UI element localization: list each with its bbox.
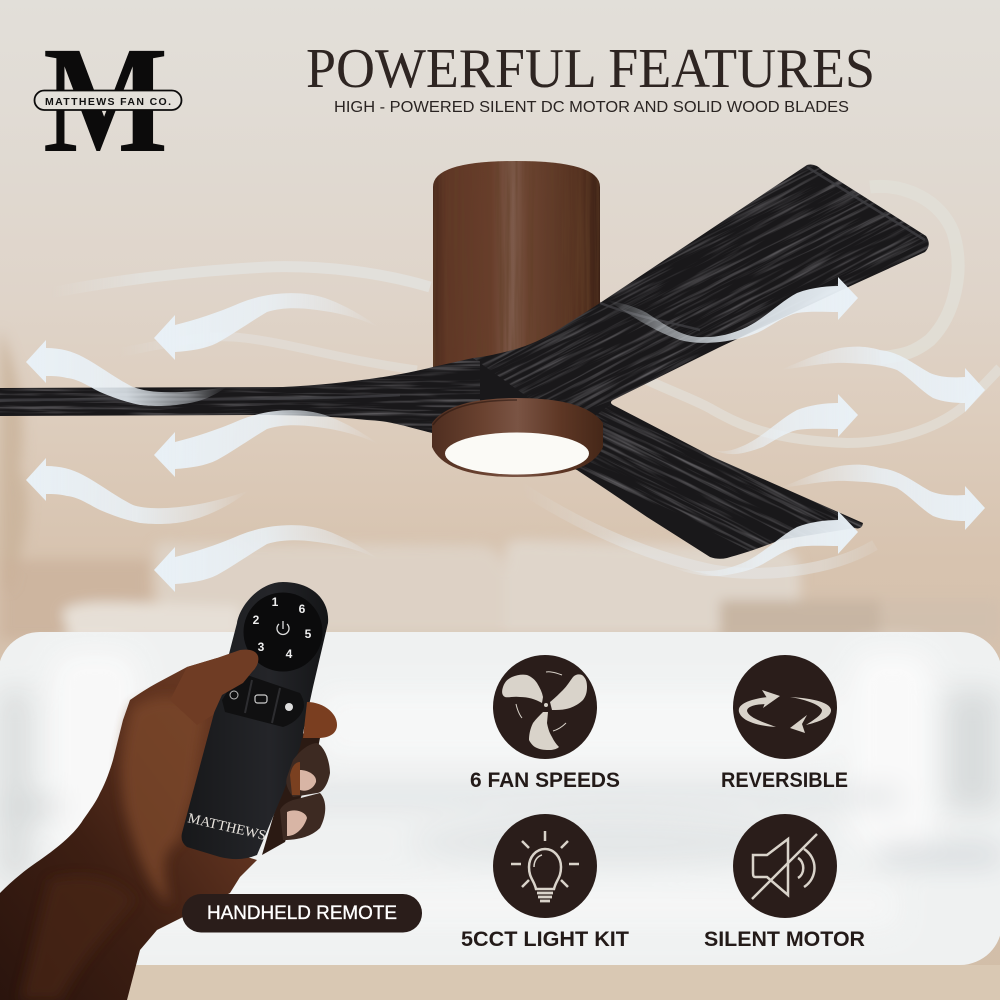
remote body bbox=[182, 582, 328, 859]
title: POWERFUL FEATURES bbox=[306, 38, 875, 100]
fan blades bbox=[0, 164, 929, 559]
arrow: bottom left bbox=[154, 525, 380, 592]
air tail: bottom right bbox=[520, 487, 875, 573]
thumb bbox=[170, 650, 258, 725]
air swirls behind fan bbox=[50, 186, 1000, 443]
arrow: middle right bbox=[710, 394, 858, 454]
feature: 6 fan speeds bbox=[470, 655, 620, 792]
feature: 5CCT light kit: 5CCT LIGHT KIT bbox=[461, 927, 629, 951]
feature: reversible bbox=[721, 655, 848, 792]
light housing ring bbox=[432, 398, 603, 477]
logo: Matthews Fan Co.: MATTHEWS FAN CO. bbox=[45, 96, 171, 108]
remote dial: 2 bbox=[253, 613, 260, 627]
arrow: middle left bbox=[154, 410, 380, 477]
arrow: upper left bbox=[154, 293, 380, 360]
feature: silent motor: SILENT MOTOR bbox=[704, 927, 865, 951]
icon: fan bbox=[502, 672, 587, 750]
arrow: far left top bbox=[26, 340, 227, 406]
remote dial bbox=[244, 592, 322, 672]
remote dial: 4 bbox=[286, 647, 293, 661]
LED light bbox=[445, 432, 589, 474]
palm highlight bbox=[121, 697, 205, 905]
label pill: handheld remote bbox=[182, 894, 422, 932]
motor canopy bbox=[433, 161, 600, 367]
icon: rotation arrows bbox=[739, 690, 831, 733]
icon: light bulb bbox=[511, 831, 579, 901]
hand holding remote bbox=[0, 582, 337, 1000]
remote buttons bbox=[222, 675, 304, 727]
feature: 6 fan speeds: 6 FAN SPEEDS bbox=[470, 768, 620, 792]
feature: reversible: REVERSIBLE bbox=[721, 768, 848, 792]
finger backing bbox=[262, 732, 320, 855]
arrow: far right top bbox=[780, 347, 985, 412]
remote brand: MATTHEWS bbox=[186, 811, 267, 844]
remote dial: 1 bbox=[272, 595, 279, 609]
airflow arrows bbox=[26, 277, 985, 592]
remote dial: 5 bbox=[305, 627, 312, 641]
arrow: bottom right bbox=[670, 511, 858, 576]
forearm tone bbox=[20, 876, 135, 1000]
remote dial: 3 bbox=[258, 640, 265, 654]
panel: frosted feature card bbox=[0, 632, 1000, 965]
remote dial: 6 bbox=[299, 602, 306, 616]
fingers bbox=[280, 702, 337, 840]
icon: muted speaker bbox=[752, 834, 817, 899]
label pill: handheld remote: HANDHELD REMOTE bbox=[207, 903, 397, 924]
arrow: far right lower bbox=[780, 465, 985, 530]
subtitle: HIGH - POWERED SILENT DC MOTOR AND SOLID WOOD BLADES bbox=[334, 99, 849, 116]
logo: Matthews Fan Co.: M bbox=[43, 16, 168, 185]
feature: silent motor bbox=[704, 814, 865, 951]
arrow: upper right bbox=[607, 277, 858, 343]
feature: 5CCT light kit bbox=[461, 814, 629, 951]
ceiling fan bbox=[0, 161, 929, 559]
hand and forearm bbox=[0, 658, 257, 1000]
arrow: far left lower bbox=[26, 458, 250, 524]
